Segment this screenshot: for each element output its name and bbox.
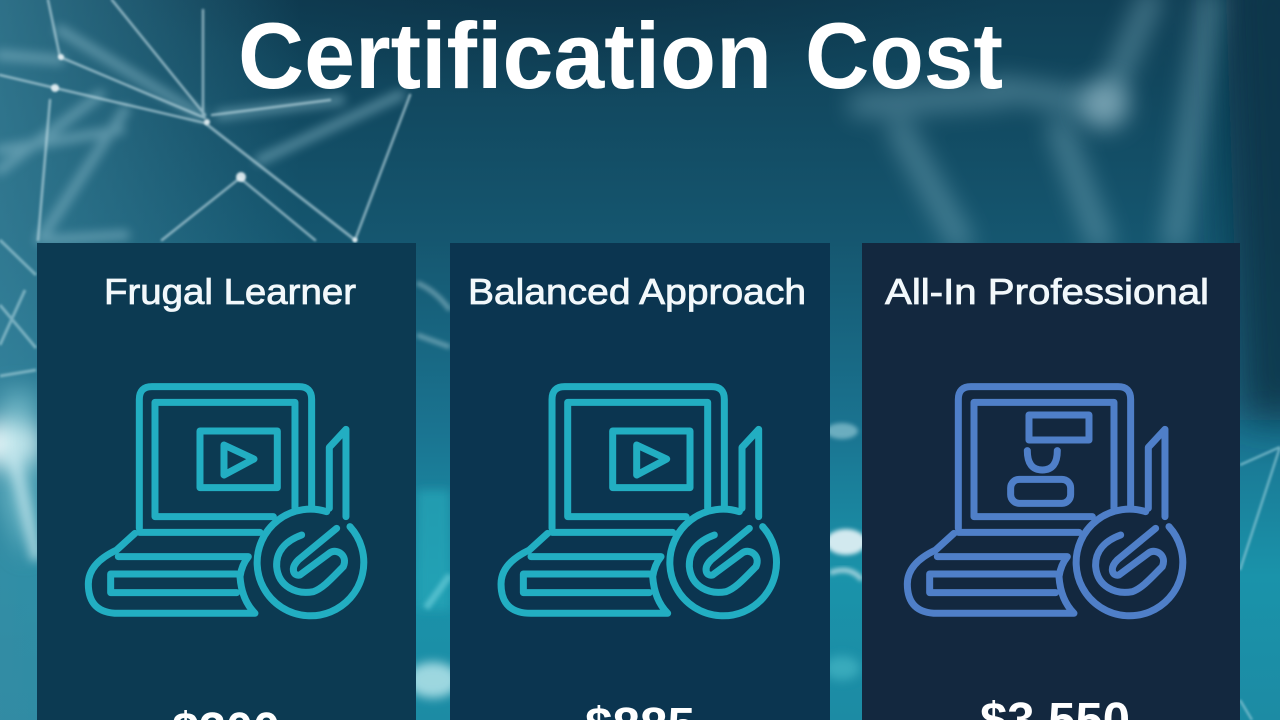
heading: Frugal Learner: Frugal Learner [104, 271, 356, 312]
heading: All-In Professional: All-In Professional [885, 271, 1209, 312]
icon: laptop with video, book and paperclip [88, 387, 364, 616]
icon: laptop with video, book and plug [501, 387, 776, 616]
panel: All-In Professional [862, 243, 1240, 720]
heading: Balanced Approach: Balanced Approach [468, 271, 806, 312]
gap glows [407, 283, 1280, 720]
panel: Balanced Approach [450, 243, 830, 720]
title: Certification [238, 3, 772, 108]
left edge glow [0, 240, 38, 560]
panel: Frugal Learner [37, 243, 416, 720]
title: Cost [805, 3, 1003, 108]
icon: laptop with profile, book and paperclip [907, 387, 1183, 616]
